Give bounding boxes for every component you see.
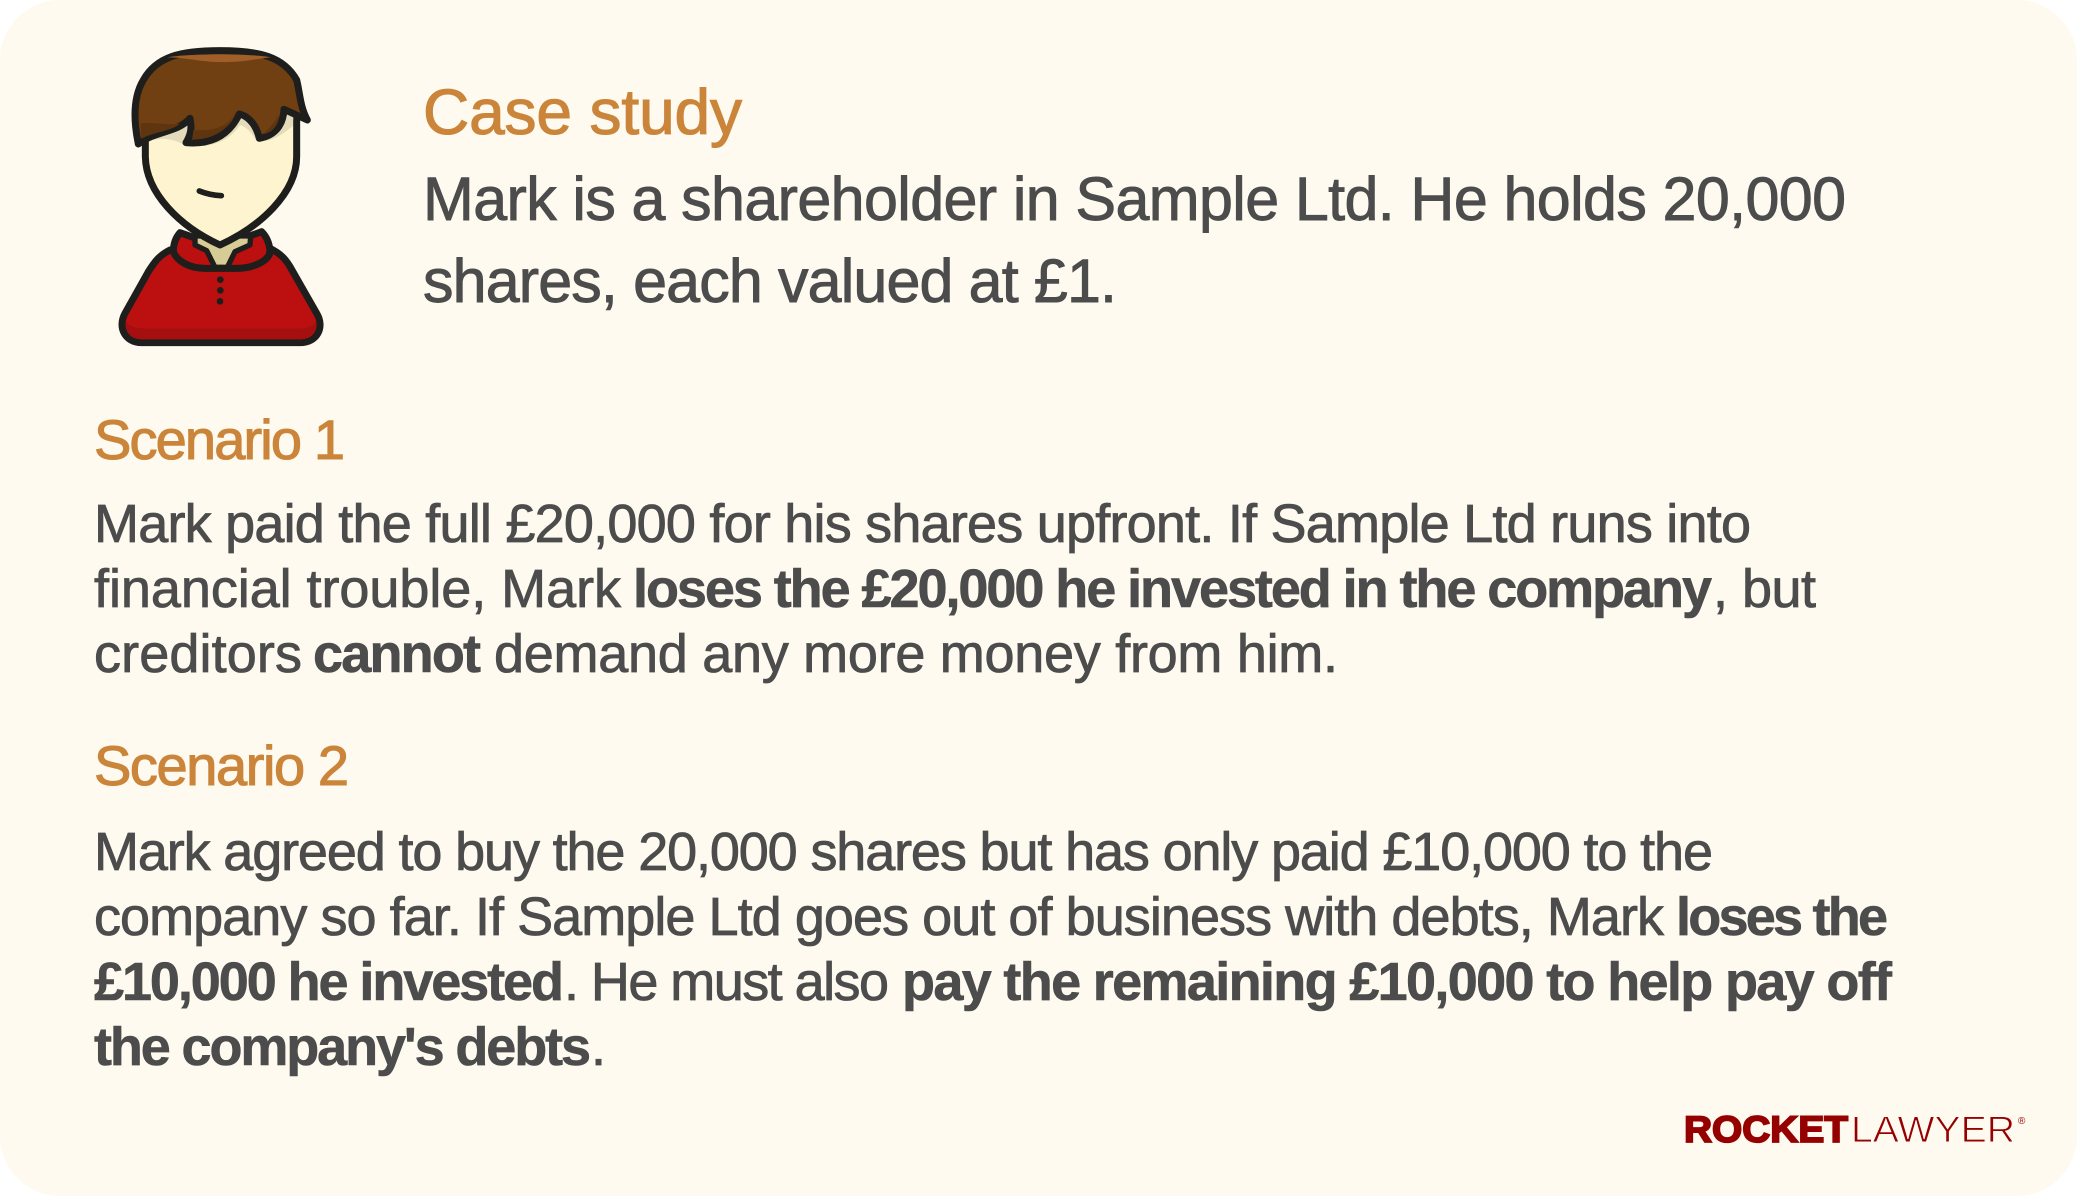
intro text <box>423 165 1846 315</box>
avatar body shade <box>126 322 316 339</box>
avatar hair <box>135 51 307 144</box>
scenario 2 text: . He must also <box>564 952 889 1012</box>
heading: scenario 2: Scenario 2 <box>94 734 349 797</box>
avatar hood <box>173 232 270 268</box>
scenario 2 text: . <box>591 1017 606 1077</box>
scenario 2 text: company so far. If Sample Ltd goes out of business with debts, Mark <box>94 887 1665 947</box>
scenario 1 text: demand any more money from him. <box>494 624 1338 684</box>
scenario 1 text: loses the £20,000 he invested in the company <box>633 559 1712 619</box>
scenario 2 text: the company's debts <box>94 1017 591 1077</box>
scenario 1 text: financial trouble, Mark <box>94 559 622 619</box>
intro text: shares, each valued at £1. <box>423 247 1117 315</box>
avatar hair shade <box>141 115 279 139</box>
scenario 2 text: loses the <box>1676 887 1888 947</box>
avatar body <box>122 248 320 343</box>
scenario 2 text: £10,000 he invested <box>94 952 564 1012</box>
icon: Mark avatar <box>122 51 320 343</box>
avatar face <box>145 107 297 245</box>
scenario 1 text: cannot <box>313 624 481 684</box>
logo: Rocket Lawyer: LAWYER <box>1851 1109 2015 1150</box>
scenario 1 text: creditors <box>94 624 302 684</box>
intro text: Mark is a shareholder in Sample Ltd. He holds 20,000 <box>423 165 1846 233</box>
avatar shirt collar <box>195 236 251 267</box>
avatar mouth <box>199 191 221 196</box>
logo: Rocket Lawyer: ROCKET <box>1684 1109 1848 1150</box>
avatar hair highlight <box>167 54 271 62</box>
heading: scenario 1: Scenario 1 <box>94 408 345 471</box>
scenario 2 text <box>94 822 1893 1077</box>
scenario 2 text: pay the remaining £10,000 to help pay off <box>902 952 1893 1012</box>
logo: Rocket Lawyer: ® <box>2018 1116 2026 1127</box>
heading: case study: Case study <box>423 76 742 148</box>
logo: Rocket Lawyer <box>1684 1109 2026 1150</box>
scenario 1 text: , but <box>1713 559 1816 619</box>
scenario 1 text <box>94 494 1816 684</box>
scenario 1 text: Mark paid the full £20,000 for his shares upfront. If Sample Ltd runs into <box>94 494 1751 554</box>
avatar buttons <box>217 276 224 305</box>
scenario 2 text: Mark agreed to buy the 20,000 shares but has only paid £10,000 to the <box>94 822 1713 882</box>
avatar face shadow <box>149 113 293 146</box>
